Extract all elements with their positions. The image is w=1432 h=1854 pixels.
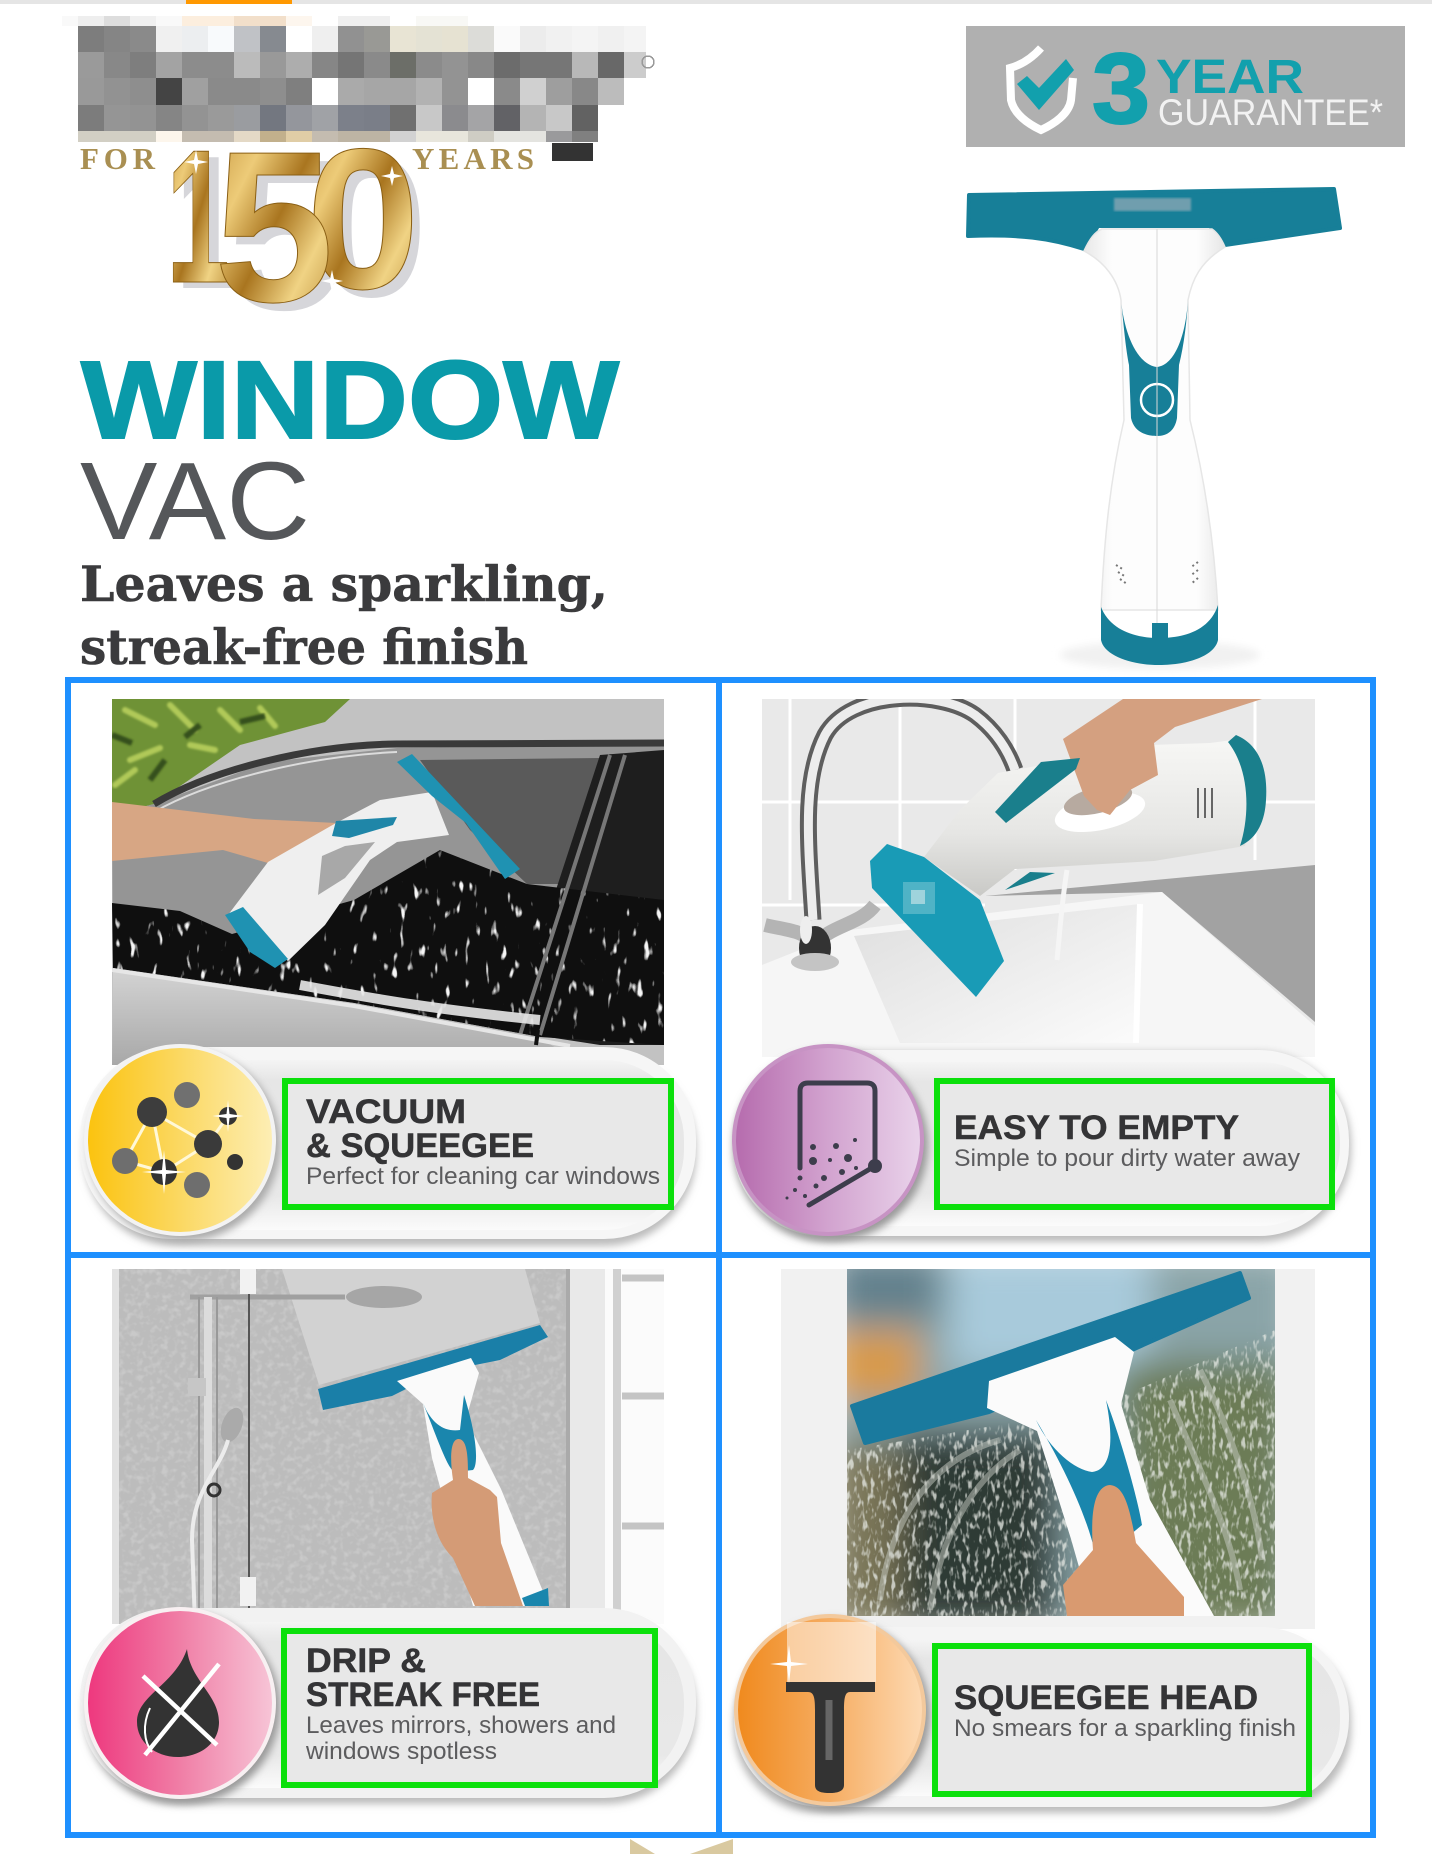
vacuum squeegee head bbox=[968, 189, 1340, 249]
anniversary badge: for 150 years bbox=[80, 106, 534, 355]
callout box: squeegee head: SQUEEGEE HEAD bbox=[954, 1679, 1258, 1717]
hand bbox=[1063, 1485, 1184, 1616]
caption pill bbox=[80, 1047, 696, 1246]
water stream bbox=[1057, 870, 1067, 960]
panel: squeegee head bbox=[734, 1250, 1351, 1813]
vacuum body bbox=[924, 739, 1262, 896]
anniversary badge: for 150 years: YEARS bbox=[412, 141, 534, 176]
callout box: easy to empty bbox=[937, 1081, 1332, 1207]
callout box: drip and streak free: windows spotless bbox=[305, 1738, 497, 1765]
callout box: drip and streak free: Leaves mirrors, showers and bbox=[306, 1712, 616, 1739]
blue selection frame grid bbox=[68, 680, 1373, 1835]
panel: easy to empty bbox=[732, 698, 1351, 1242]
callout box: squeegee head: No smears for a sparkling finish bbox=[954, 1715, 1296, 1742]
anniversary badge: for 150 years: 1 bbox=[176, 117, 240, 329]
title: window vac: WINDOW bbox=[81, 339, 619, 462]
hand and arm bbox=[112, 802, 336, 865]
photo: car window bbox=[112, 699, 664, 1065]
title: window vac bbox=[80, 339, 619, 563]
guarantee badge: 3 bbox=[1092, 33, 1150, 145]
chrome faucet bbox=[808, 698, 1015, 920]
callout box: drip and streak free bbox=[284, 1631, 655, 1785]
callout box: easy to empty: Simple to pour dirty water away bbox=[954, 1145, 1300, 1172]
tagline bbox=[80, 555, 608, 676]
pixelated brand logo bbox=[62, 16, 654, 161]
pale photo backing bbox=[781, 1269, 1315, 1629]
callout box: easy to empty: EASY TO EMPTY bbox=[954, 1109, 1239, 1147]
panel: drip and streak free bbox=[80, 1269, 696, 1804]
photo: soapy window bbox=[847, 1269, 1275, 1616]
title: window vac: VAC bbox=[80, 440, 310, 563]
callout box: drip and streak free: STREAK FREE bbox=[306, 1676, 540, 1714]
callout box: vacuum and squeegee bbox=[285, 1081, 671, 1207]
product: window vacuum bbox=[968, 189, 1340, 669]
caption pill bbox=[733, 1050, 1351, 1242]
vacuum base bbox=[1101, 605, 1218, 665]
caption pill bbox=[734, 1627, 1351, 1813]
squeegee head bbox=[852, 1273, 1249, 1443]
tagline: streak-free finish bbox=[80, 618, 528, 676]
guarantee badge: YEAR bbox=[1156, 51, 1304, 104]
callout box: drip and streak free: DRIP & bbox=[306, 1642, 426, 1680]
anniversary badge: for 150 years: 0 bbox=[306, 108, 420, 331]
guarantee badge bbox=[966, 26, 1405, 147]
callout box: vacuum and squeegee: VACUUM bbox=[306, 1093, 466, 1131]
icon: squeegee on orange disc bbox=[734, 1614, 930, 1811]
anniversary badge: for 150 years: 1 bbox=[166, 111, 230, 323]
caption pill bbox=[80, 1608, 696, 1804]
icon: tank on purple disc bbox=[732, 1044, 928, 1241]
panel: vacuum and squeegee bbox=[80, 699, 696, 1246]
anniversary badge: for 150 years: 5 bbox=[225, 114, 345, 355]
icon: shield with check bbox=[1010, 48, 1074, 130]
icon: molecules on yellow disc bbox=[84, 1044, 280, 1241]
tagline: Leaves a sparkling, bbox=[80, 555, 608, 613]
hand bbox=[1063, 699, 1262, 815]
anniversary badge: for 150 years: 0 bbox=[316, 116, 428, 339]
cropped tan shape at page bottom bbox=[630, 1839, 733, 1854]
guarantee badge: GUARANTEE* bbox=[1158, 92, 1383, 133]
icon: crossed drop on pink disc bbox=[84, 1607, 280, 1804]
hand bbox=[432, 1439, 523, 1606]
vacuum head bbox=[870, 844, 1004, 997]
callout box: vacuum and squeegee: Perfect for cleaning car windows bbox=[306, 1163, 660, 1190]
squeegee on mirror bbox=[318, 1325, 548, 1410]
callout box: squeegee head bbox=[935, 1646, 1309, 1794]
anniversary badge: for 150 years: 5 bbox=[214, 106, 334, 347]
photo: shower door bbox=[112, 1269, 664, 1624]
anniversary badge: for 150 years: FOR bbox=[80, 141, 156, 176]
top browser bar bbox=[0, 0, 1432, 4]
vacuum body bbox=[1084, 229, 1225, 610]
photo: emptying at sink bbox=[762, 698, 1315, 1057]
vacuum on window bbox=[228, 792, 449, 961]
callout box: vacuum and squeegee: & SQUEEGEE bbox=[306, 1127, 534, 1165]
